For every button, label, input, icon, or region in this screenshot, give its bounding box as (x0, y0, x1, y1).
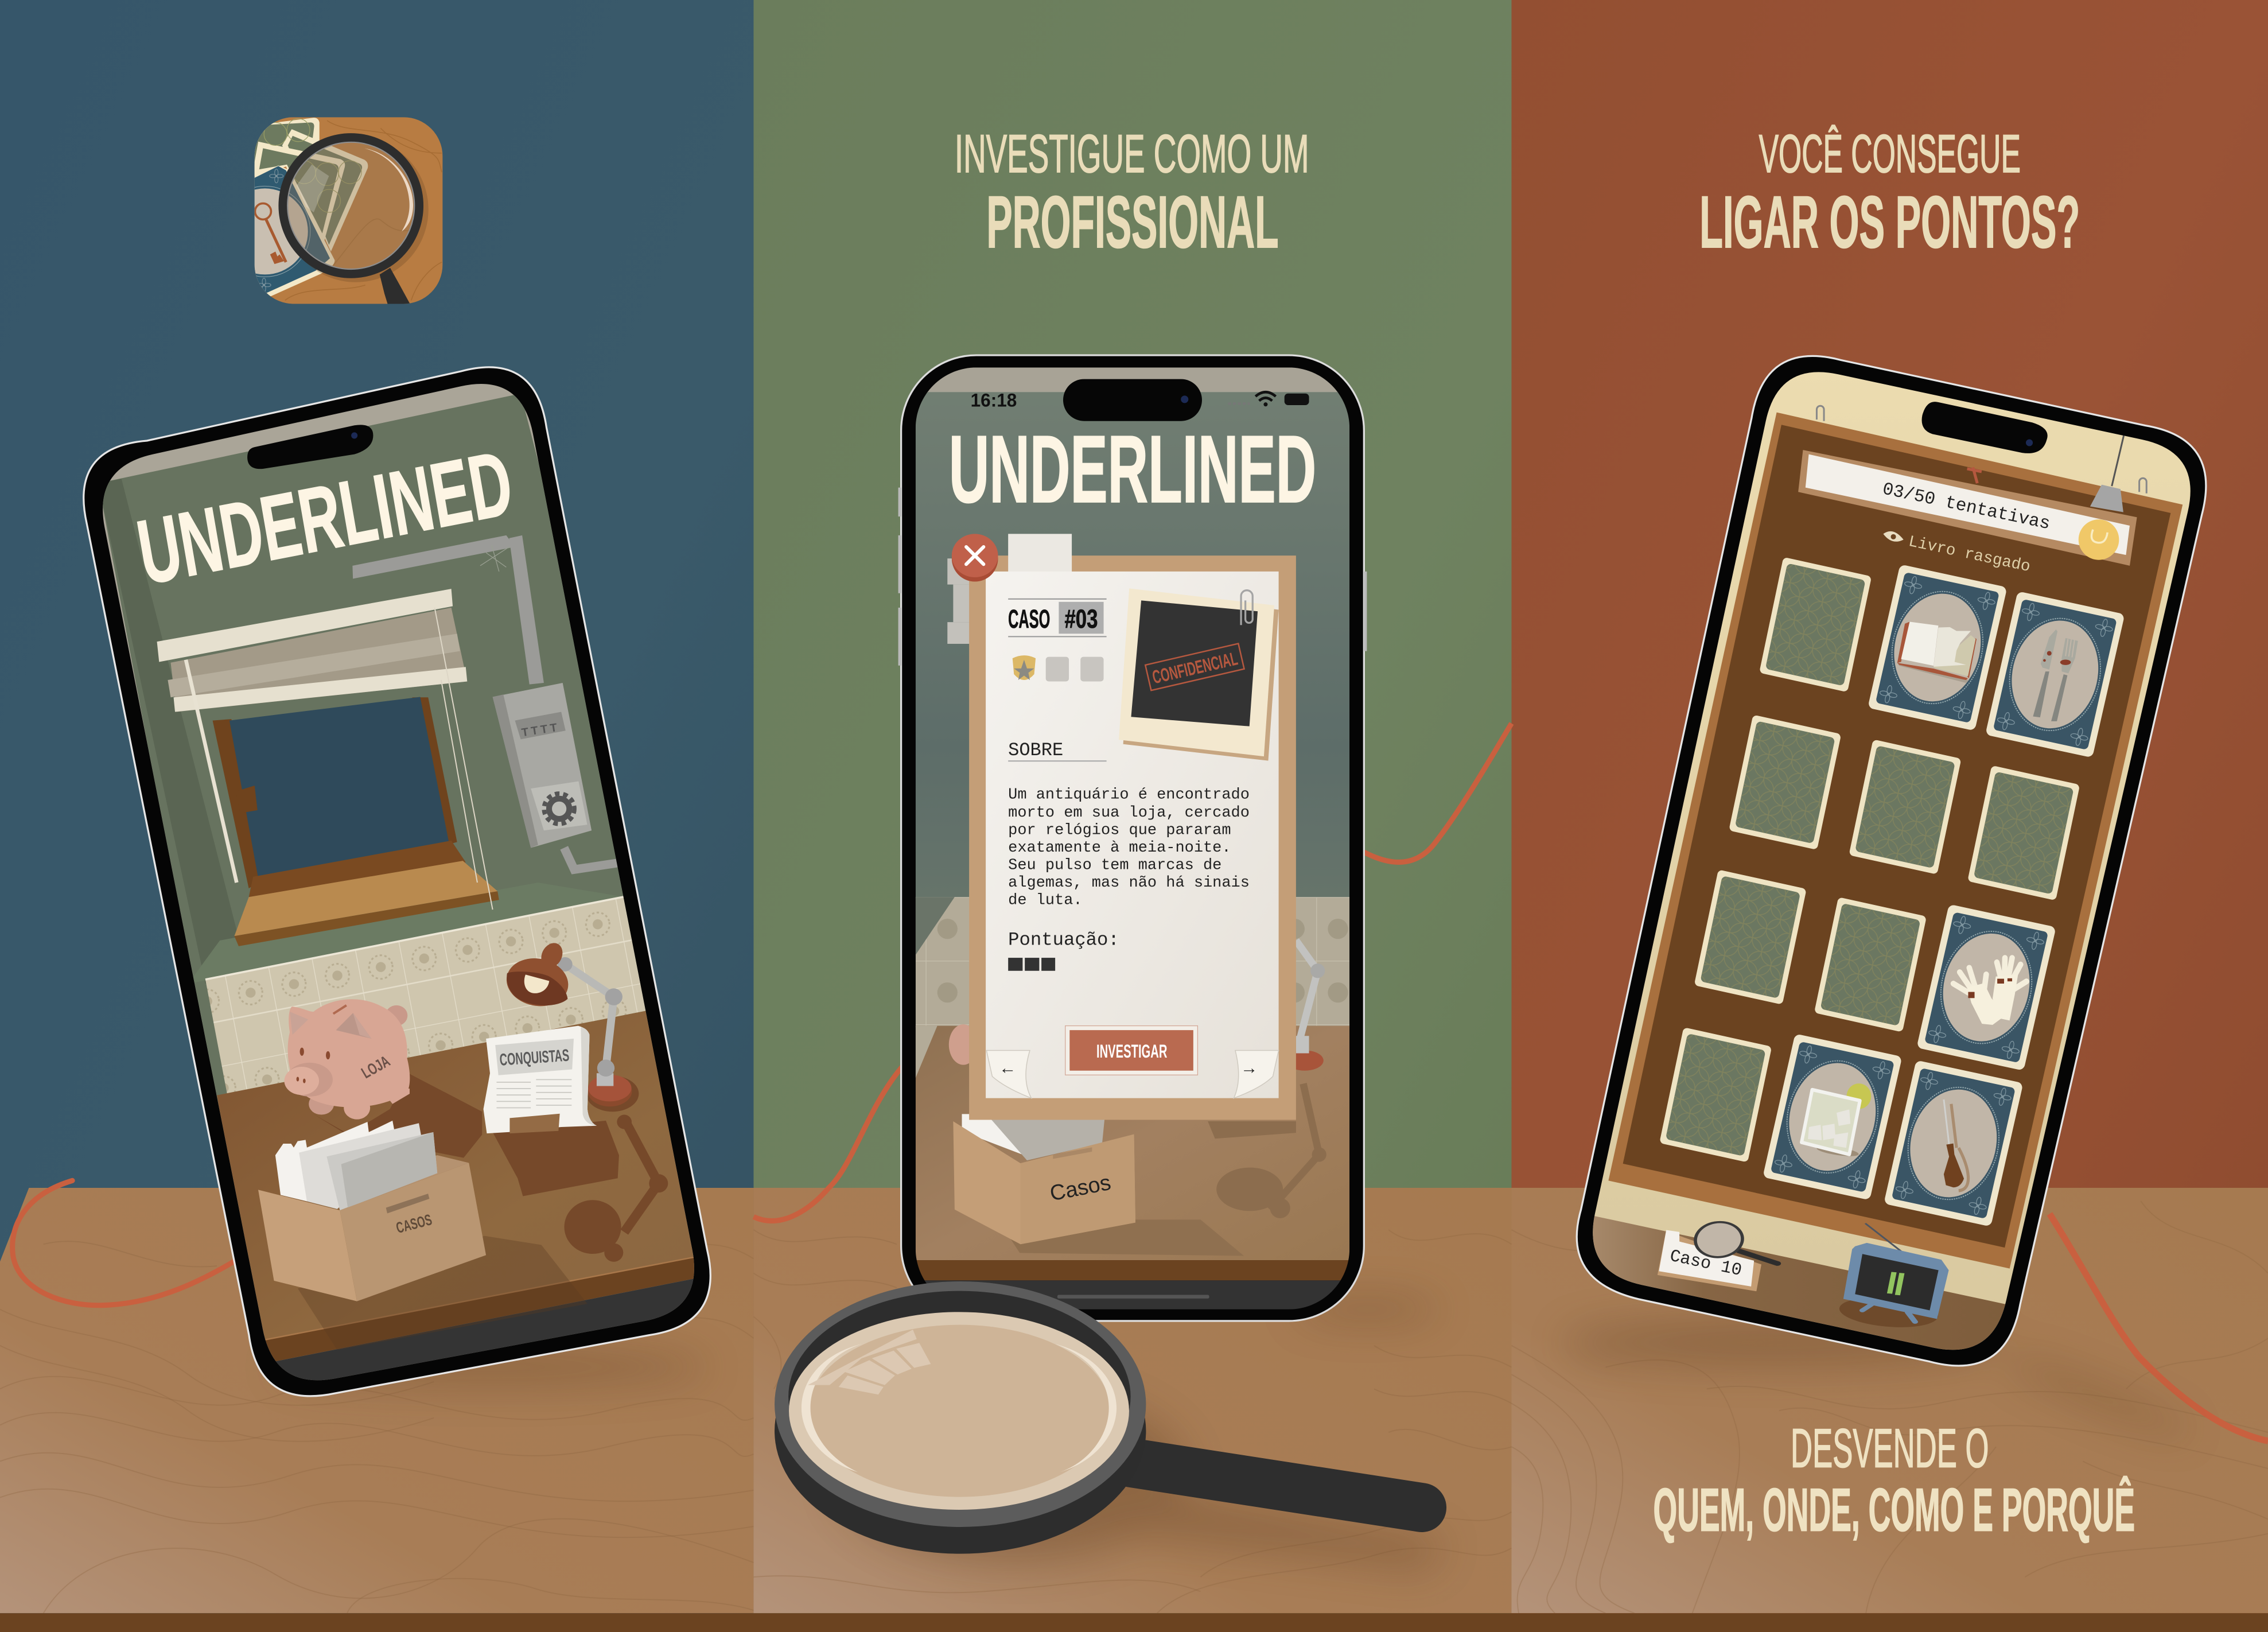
back cards (1659, 557, 2080, 1163)
nav arrow left (986, 1050, 1032, 1098)
card: knife and fork (1985, 591, 2125, 758)
polaroid photo: CONFIDENCIAL (1150, 647, 1239, 687)
status bar (971, 389, 1309, 410)
card: gloves (1916, 904, 2056, 1071)
case description: morto em sua loja, cercado (1008, 805, 1250, 822)
nav arrow right (1234, 1050, 1279, 1098)
title: underlined: UNDERLINED (131, 431, 519, 604)
pause tv (1837, 1223, 1949, 1331)
panel: rust background (1511, 0, 2268, 1632)
table front edge (0, 1613, 2268, 1632)
tile wall (205, 896, 647, 1094)
case description: de luta. (1008, 892, 1083, 909)
desk lamp (502, 939, 632, 1106)
box: casos: CASOS (394, 1211, 434, 1237)
case description: por relógios que pararam (1008, 822, 1231, 839)
box behind dossier (953, 1114, 1244, 1256)
panel: green background (753, 0, 1511, 1632)
wooden table (0, 1188, 2268, 1613)
desk objects drawn in detail coordinates (258, 939, 668, 1350)
red cable left (13, 1180, 239, 1305)
case description: algemas, mas não há sinais (1008, 875, 1250, 892)
heading: investigue: PROFISSIONAL (986, 181, 1279, 263)
big magnifying glass (775, 1281, 1422, 1554)
polaroid photo (1119, 588, 1279, 761)
newspaper: conquistas: CONQUISTAS (499, 1046, 570, 1070)
newspaper: conquistas (484, 1026, 597, 1133)
red cable right (2049, 1214, 2268, 1441)
caption: desvende: DESVENDE O (1791, 1418, 1989, 1479)
hanging light bulb (2079, 431, 2125, 560)
score: Pontuação: (1008, 929, 1119, 950)
box: casos (258, 1121, 486, 1301)
pipes and meter box: TTTT (521, 721, 558, 739)
badges (1013, 655, 1104, 682)
case label text: Caso 10 (1668, 1247, 1744, 1281)
card: torn book (1868, 564, 2008, 731)
icon: app icon (255, 117, 443, 304)
desk (217, 1007, 716, 1343)
icon magnifier (283, 137, 429, 306)
button: investigar: INVESTIGAR (1096, 1040, 1167, 1062)
dynamic island (247, 425, 373, 469)
lamp and shadow behind dossier (1208, 941, 1326, 1218)
pipes and meter box (352, 535, 622, 869)
phone 3: memory board (1562, 347, 2213, 1374)
score (1008, 929, 1119, 971)
piggy bank (284, 999, 410, 1120)
clue label: Livro rasgado (1907, 533, 2032, 576)
attempts label: 03/50 tentativas (1881, 479, 2052, 534)
window blinds (157, 589, 493, 910)
icon blue card with key (255, 165, 335, 296)
case description: SOBRE (1008, 740, 1063, 761)
icon card backs (254, 118, 368, 251)
phone 1: home screen (58, 347, 738, 1418)
caption: desvende (1654, 1418, 2135, 1544)
case number (1008, 599, 1107, 636)
window (213, 697, 499, 946)
heading: ligar os pontos: VOCÊ CONSEGUE (1759, 124, 2021, 184)
case description: Seu pulso tem marcas de (1008, 857, 1221, 874)
close button (952, 534, 998, 582)
heading: investigue (955, 124, 1309, 263)
piggy bank: LOJA (359, 1052, 393, 1082)
title: underlined: UNDERLINED (949, 416, 1316, 523)
case description: exatamente à meia-noite. (1008, 840, 1231, 857)
dynamic island (1922, 402, 2048, 453)
case label with magnifier (1658, 1219, 1777, 1291)
card: awl tool (1884, 1060, 2023, 1227)
red cable middle right (1364, 724, 1511, 862)
phone 2: case dossier (898, 355, 1367, 1321)
button: investigar (1065, 1026, 1197, 1075)
dynamic island (1063, 379, 1202, 421)
card: glass of lemonade (1763, 1033, 1902, 1200)
heading: ligar os pontos (1699, 124, 2080, 263)
cork board frame (1608, 413, 2183, 1269)
case number: CASO (1008, 604, 1050, 634)
red cable middle left (753, 1066, 902, 1221)
box behind dossier: Casos (1048, 1171, 1113, 1206)
nav arrow right: → (1244, 1060, 1255, 1079)
panel: blue background (0, 0, 753, 1632)
nav arrow left: ← (1002, 1060, 1013, 1079)
case description: Um antiquário é encontrado (1008, 787, 1250, 804)
heading: investigue: INVESTIGUE COMO UM (955, 124, 1309, 184)
grey fixture behind dossier (947, 558, 971, 644)
table shadows (275, 1298, 2195, 1570)
case number: #03 (1064, 604, 1098, 634)
case description (1008, 740, 1250, 909)
attempts label (1798, 450, 2137, 566)
dossier folder (952, 534, 1296, 1120)
piggy behind dossier (949, 1024, 978, 1065)
desk shadows (313, 1073, 668, 1262)
status bar: 16:18 (971, 389, 1017, 410)
